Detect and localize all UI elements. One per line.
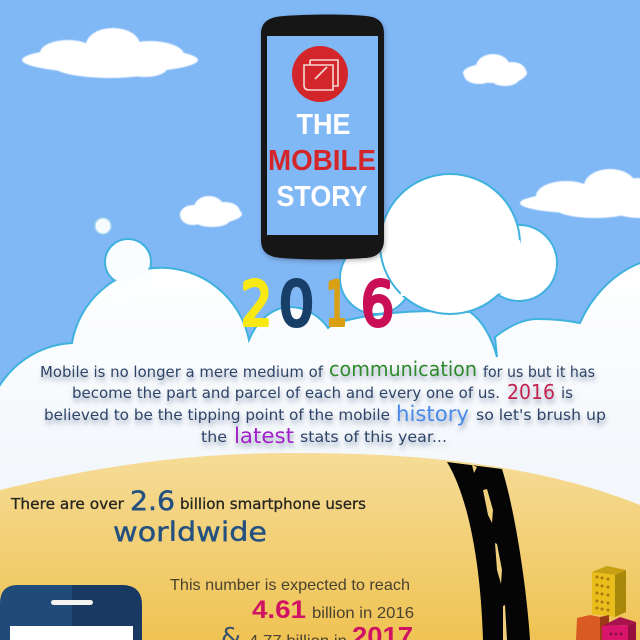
icon: logo badge (292, 46, 348, 102)
intro paragraph: the (201, 428, 227, 446)
phone screen (267, 36, 378, 235)
cloud: small centre (180, 196, 242, 227)
year 2016 (241, 269, 394, 340)
phone body (261, 14, 384, 260)
year 2016: 6 (361, 269, 394, 340)
intro paragraph: for us but it has (483, 363, 595, 381)
phone title (268, 109, 376, 213)
intro paragraph: history (396, 402, 469, 426)
intro paragraph: Mobile is no longer a mere medium of (40, 363, 324, 381)
number 4.61: 4.61 (252, 596, 306, 624)
intro paragraph: latest (234, 424, 294, 448)
intro paragraph: 2016 (507, 380, 555, 404)
road dashes (472, 465, 507, 640)
year 2016: 1 (326, 269, 347, 340)
stat: users (10, 486, 366, 548)
year 2016: 0 (279, 269, 314, 340)
main cloud body (0, 239, 640, 640)
icon: smartphone (0, 585, 142, 640)
phone title: MOBILE (268, 145, 376, 177)
tiny bubble (95, 218, 111, 234)
users text: There are over (10, 495, 125, 513)
intro paragraph: so let's brush up (476, 406, 606, 424)
stat: forecast: billion in 2016 (312, 605, 414, 622)
intro paragraph: communication (329, 357, 477, 381)
cloud: top left (22, 28, 198, 78)
right big puff (340, 174, 557, 314)
sand hill (0, 453, 640, 640)
cloud: mid right (520, 169, 640, 218)
cloud: top right (463, 54, 527, 86)
stat: forecast (170, 577, 414, 640)
road (447, 462, 530, 640)
phone title: STORY (276, 181, 368, 213)
icon: city buildings (576, 566, 636, 640)
phone (261, 14, 384, 260)
worldwide: worldwide (113, 517, 267, 548)
intro paragraph: become the part and parcel of each and every one of us. (72, 384, 500, 402)
stat: forecast: This number is expected to reach (170, 577, 410, 594)
intro paragraph (40, 357, 606, 448)
intro paragraph: believed to be the tipping point of the mobile (44, 406, 390, 424)
intro paragraph: is (561, 384, 573, 402)
year 2016: 2 (241, 269, 272, 340)
intro paragraph: stats of this year... (300, 428, 447, 446)
stat: users: billion smartphone users (180, 495, 366, 513)
phone title: THE (296, 109, 350, 141)
number 2.6: 2.6 (130, 486, 175, 517)
road surface (447, 462, 530, 640)
